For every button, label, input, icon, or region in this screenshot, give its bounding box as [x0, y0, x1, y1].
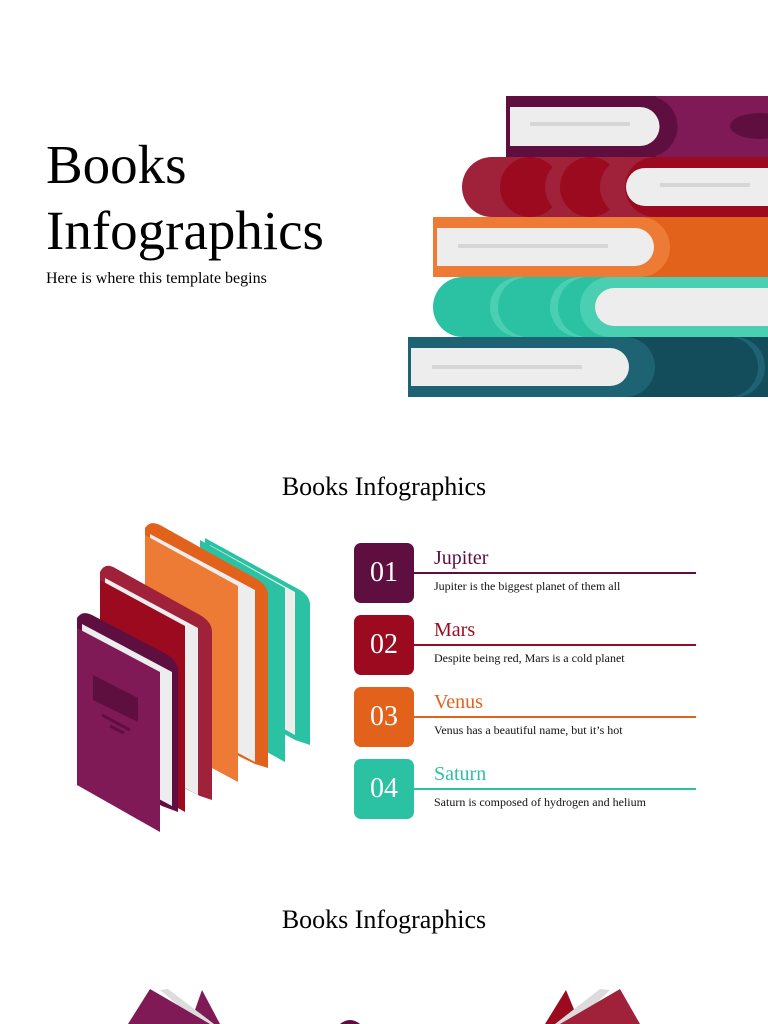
text: Venus has a beautiful name, but it’s hot	[434, 723, 623, 737]
text: 02	[370, 629, 398, 660]
item 03 Venus	[354, 687, 696, 747]
text: 01	[370, 557, 398, 588]
item 04 Saturn	[354, 759, 696, 819]
text: Jupiter is the biggest planet of them all	[434, 579, 620, 593]
illustration: open books	[128, 989, 640, 1024]
section heading 1: Books Infographics	[282, 472, 486, 501]
item 02 Mars	[354, 615, 696, 675]
text: 04	[370, 773, 398, 804]
item 01 Jupiter	[354, 543, 696, 603]
illustration: stacked books	[408, 96, 768, 397]
subtitle: Here is where this template begins	[46, 270, 267, 287]
text: 03	[370, 701, 398, 732]
text: Jupiter	[434, 547, 488, 569]
title: Infographics	[46, 200, 324, 261]
title	[46, 134, 324, 261]
title: Books	[46, 134, 187, 195]
text: Mars	[434, 619, 475, 641]
illustration: standing books	[77, 523, 310, 832]
section heading 2: Books Infographics	[282, 905, 486, 934]
text: Saturn is composed of hydrogen and helium	[434, 795, 646, 809]
text: Despite being red, Mars is a cold planet	[434, 651, 625, 665]
text: Saturn	[434, 763, 486, 785]
text: Venus	[434, 691, 483, 713]
